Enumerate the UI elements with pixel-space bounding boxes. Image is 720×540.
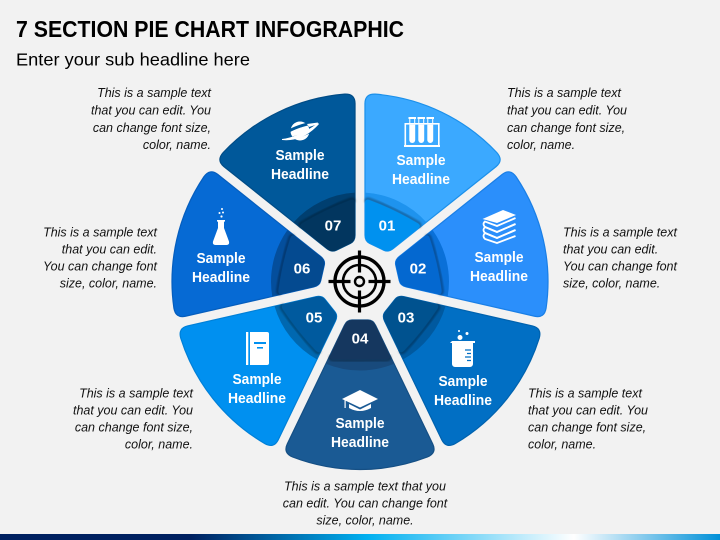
- title: 7 SECTION PIE CHART INFOGRAPHIC: [16, 16, 404, 42]
- number 04: 04: [352, 330, 369, 348]
- text block: top right: [507, 86, 627, 152]
- headline 05: Sample: [232, 372, 282, 388]
- icon: graduation cap: [342, 390, 378, 411]
- icon: test tubes: [404, 117, 440, 147]
- text block: top left: can change font size,: [93, 121, 211, 135]
- text block: lower left: can change font size,: [75, 421, 193, 435]
- icon: flask: [213, 208, 229, 245]
- text block: lower right: [528, 387, 648, 452]
- wedge 06: [160, 167, 339, 345]
- text block: top left: This is a sample text: [97, 86, 212, 100]
- headline 02: Sample: [474, 250, 524, 266]
- headline 04: Headline: [331, 435, 389, 451]
- icon: notebook: [246, 332, 269, 365]
- headline 06: Headline: [192, 270, 250, 286]
- wedge 04: [286, 320, 434, 469]
- text block: lower left: This is a sample text: [79, 387, 194, 401]
- headline 04: Sample: [336, 416, 384, 432]
- wedge 02: [381, 167, 560, 345]
- number 01: 01: [379, 218, 395, 234]
- icon: beaker: [450, 330, 475, 367]
- headline 02: Headline: [470, 269, 528, 285]
- number 05: 05: [306, 310, 322, 326]
- icon: planet: [281, 120, 319, 142]
- text block: bottom center: [283, 480, 448, 528]
- text block: middle right: This is a sample text: [563, 226, 677, 240]
- wedge 01: [310, 80, 508, 279]
- text block: lower right: color, name.: [528, 438, 596, 452]
- text block: middle left: that you can edit.: [62, 243, 157, 257]
- text block: middle left: You can change font: [43, 260, 158, 274]
- headline 05: Headline: [228, 391, 286, 407]
- text block: top left: color, name.: [143, 138, 211, 152]
- sub headline: Enter your sub headline here: [16, 50, 250, 70]
- text block: middle right: that you can edit.: [563, 243, 658, 257]
- icon: books: [482, 210, 516, 243]
- text block: lower left: that you can edit. You: [73, 404, 193, 418]
- text block: top right: This is a sample text: [507, 86, 621, 100]
- text block: lower right: that you can edit. You: [528, 404, 648, 418]
- text block: middle right: [563, 226, 678, 291]
- headline 07: Sample: [276, 148, 324, 164]
- text block: lower left: [73, 387, 194, 452]
- number 03: 03: [398, 310, 414, 326]
- section 05: [167, 248, 376, 457]
- text block: middle left: [43, 226, 158, 291]
- text block: top left: that you can edit. You: [91, 104, 211, 118]
- section 04: [286, 320, 434, 469]
- text block: top left: [91, 86, 212, 152]
- text block: lower right: This is a sample text: [528, 387, 642, 401]
- headline 01: Headline: [392, 172, 450, 188]
- number 07: 07: [325, 218, 341, 234]
- headline 03: Headline: [434, 393, 492, 409]
- footer gradient bar: [0, 534, 720, 540]
- text block: bottom center: This is a sample text that you: [284, 480, 446, 494]
- section 02: [381, 167, 560, 345]
- headline 03: Sample: [438, 374, 488, 390]
- text block: bottom center: size, color, name.: [316, 514, 414, 528]
- headline 06: Sample: [196, 251, 246, 267]
- section 01: [310, 80, 508, 279]
- section 06: [160, 167, 339, 345]
- text block: middle left: This is a sample text: [43, 226, 158, 240]
- text block: top right: that you can edit. You: [507, 104, 627, 118]
- headline 01: Sample: [396, 153, 446, 169]
- text block: middle right: You can change font: [563, 260, 678, 274]
- text block: top right: color, name.: [507, 138, 575, 152]
- section 03: [344, 248, 553, 457]
- wedge 03: [344, 248, 553, 457]
- text block: lower left: color, name.: [125, 438, 193, 452]
- headline 07: Headline: [271, 167, 329, 183]
- wedge 07: [212, 80, 410, 279]
- text block: lower right: can change font size,: [528, 421, 646, 435]
- section 07: [212, 80, 410, 279]
- text block: top right: can change font size,: [507, 121, 625, 135]
- number 06: 06: [294, 260, 310, 278]
- text block: middle right: size, color, name.: [563, 277, 660, 291]
- icon: center target: [328, 250, 390, 312]
- number 02: 02: [410, 260, 426, 278]
- text block: bottom center: can edit. You can change font: [283, 497, 448, 511]
- wedge 05: [167, 248, 376, 457]
- text block: middle left: size, color, name.: [60, 277, 157, 291]
